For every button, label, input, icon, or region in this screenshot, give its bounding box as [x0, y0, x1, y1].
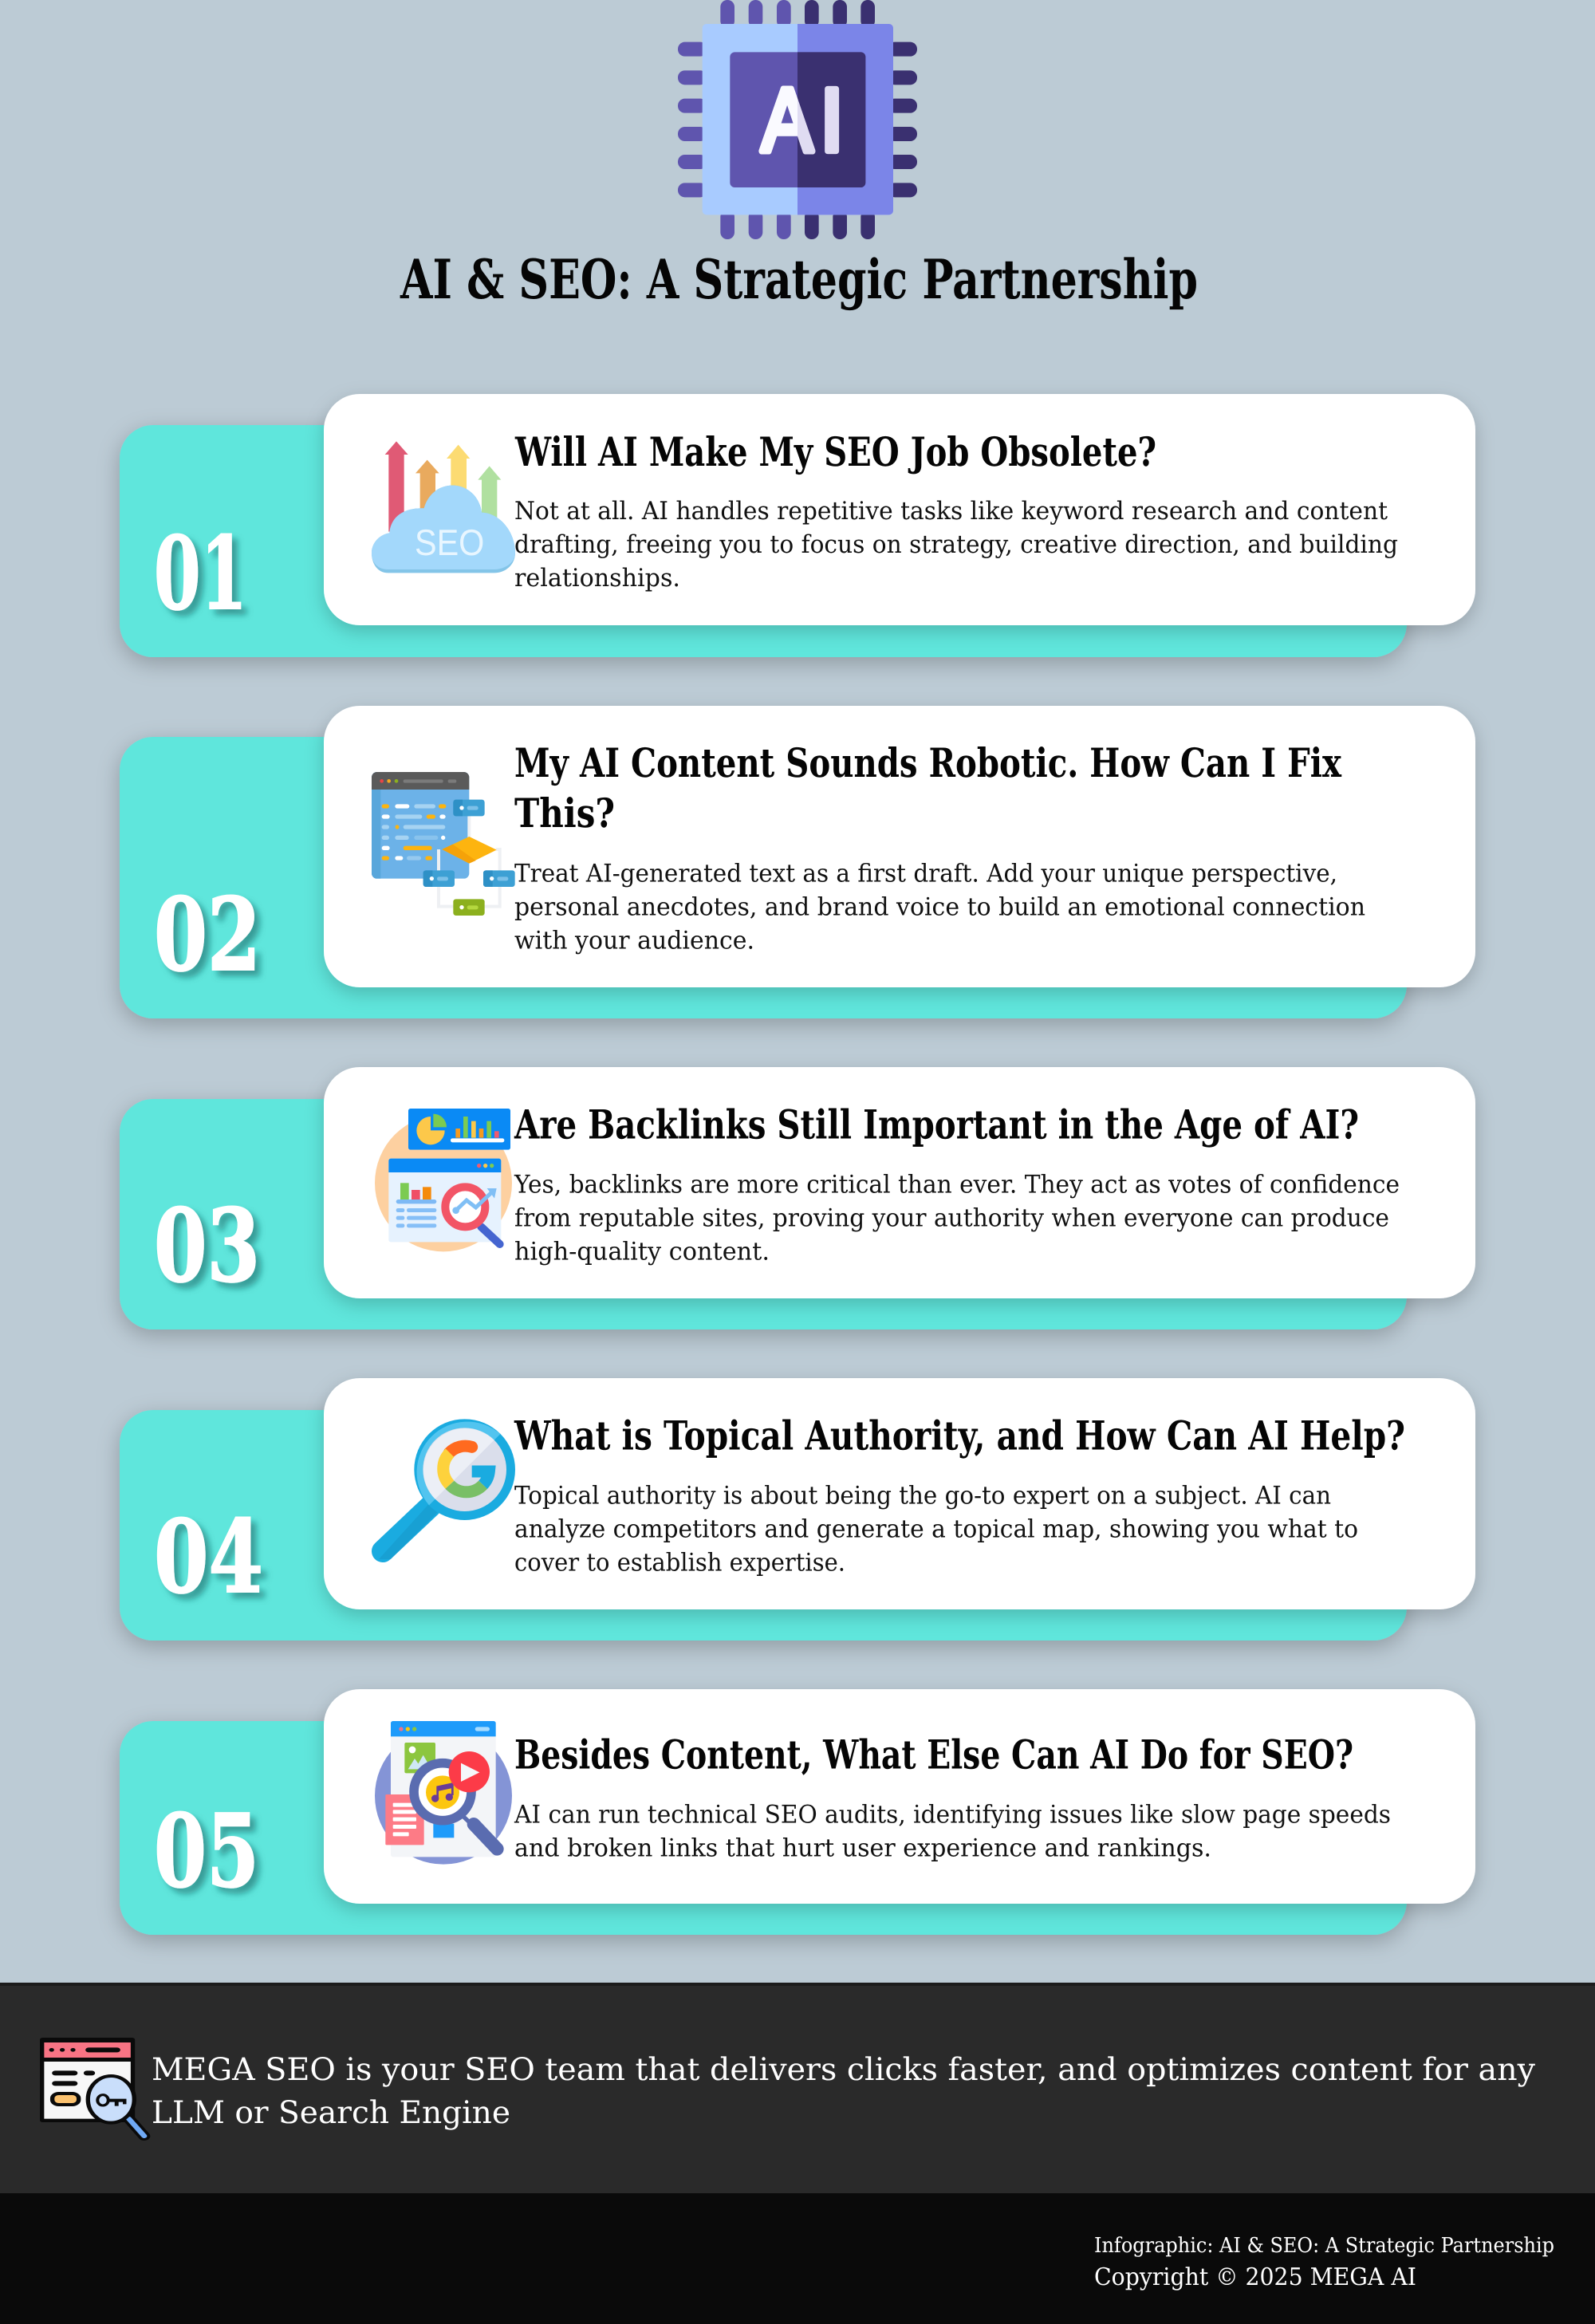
- footer message: LLM or Search Engine: [152, 2095, 510, 2131]
- teal backing card 04: [120, 1410, 1407, 1641]
- white card 04: [324, 1378, 1475, 1609]
- body text 02: personal anecdotes, and brand voice to build an emotional connection: [514, 893, 1365, 922]
- icon: flowchart window: [372, 772, 515, 916]
- icon: AI chip: A: [762, 69, 813, 171]
- body text 02: with your audience.: [514, 927, 754, 955]
- body text 01: drafting, freeing you to focus on strategy, creative direction, and building: [514, 530, 1398, 559]
- white card 01: [324, 394, 1475, 625]
- icon: Google magnifier: [379, 1419, 515, 1559]
- heading 03: Are Backlinks Still Important in the Age of AI?: [514, 1101, 1359, 1148]
- body text 05: AI can run technical SEO audits, identifying issues like slow page speeds: [514, 1801, 1391, 1830]
- heading 01: Will AI Make My SEO Job Obsolete?: [514, 428, 1156, 475]
- white card 02: [324, 706, 1475, 987]
- body text 03: high-quality content.: [514, 1238, 770, 1266]
- white card 05: [324, 1689, 1475, 1904]
- body text 03: [514, 1171, 1400, 1266]
- body text 01: Not at all. AI handles repetitive tasks like keyword research and content: [514, 497, 1388, 526]
- number 03: 03: [154, 1187, 260, 1305]
- number 04: 04: [154, 1498, 263, 1616]
- body text 04: analyze competitors and generate a topical map, showing you what to: [514, 1515, 1358, 1544]
- teal backing card 05: [120, 1721, 1407, 1935]
- heading 05: Besides Content, What Else Can AI Do for SEO?: [514, 1731, 1353, 1778]
- body text 05: [514, 1801, 1391, 1863]
- teal backing card 02: [120, 737, 1407, 1018]
- icon: SEO cloud with arrows: SEO: [415, 522, 484, 563]
- title: AI & SEO: A Strategic Partnership: [400, 248, 1198, 312]
- body text 02: Treat AI-generated text as a first draft. Add your unique perspective,: [514, 860, 1337, 888]
- footer message: [152, 2052, 1535, 2131]
- body text 01: [514, 497, 1398, 593]
- footer message: MEGA SEO is your SEO team that delivers clicks faster, and optimizes content for any: [152, 2052, 1535, 2088]
- icon: media search: [375, 1721, 512, 1865]
- panel: item 05: [120, 1689, 1475, 1935]
- heading 04: What is Topical Authority, and How Can AI Help?: [514, 1412, 1405, 1459]
- icon: AI chip: [678, 0, 917, 239]
- body text 04: cover to establish expertise.: [514, 1549, 845, 1578]
- panel: footer call to action: [0, 1983, 1595, 2193]
- number 05: 05: [154, 1792, 259, 1910]
- number 02: 02: [154, 876, 261, 994]
- infographic credit: Infographic: AI & SEO: A Strategic Partnership: [1094, 2234, 1554, 2258]
- panel: item 02: [120, 706, 1475, 1018]
- heading 02: [514, 739, 1342, 837]
- teal backing card 03: [120, 1099, 1407, 1329]
- body text 04: [514, 1482, 1358, 1578]
- footer background: [0, 1983, 1595, 2193]
- icon: AI chip: I: [819, 69, 845, 171]
- icon: analytics dashboard: [375, 1109, 512, 1251]
- heading 02: This?: [514, 790, 615, 837]
- white card 03: [324, 1067, 1475, 1298]
- body text 02: [514, 860, 1365, 955]
- heading 02: My AI Content Sounds Robotic. How Can I Fix: [514, 739, 1342, 786]
- body text 03: from reputable sites, proving your authority when everyone can produce: [514, 1204, 1389, 1233]
- panel: item 03: [120, 1067, 1475, 1329]
- body text 05: and broken links that hurt user experience and rankings.: [514, 1834, 1211, 1863]
- teal backing card 01: [120, 425, 1407, 657]
- icon: keyword search window: [40, 2038, 144, 2136]
- panel: item 04: [120, 1378, 1475, 1641]
- number 01: 01: [154, 514, 247, 632]
- body text 01: relationships.: [514, 564, 680, 593]
- copyright notice: Copyright © 2025 MEGA AI: [1094, 2263, 1416, 2291]
- copyright background: [0, 2193, 1595, 2324]
- panel: copyright bar: [0, 2193, 1595, 2324]
- body text 04: Topical authority is about being the go-to expert on a subject. AI can: [514, 1482, 1331, 1511]
- body text 03: Yes, backlinks are more critical than ever. They act as votes of confidence: [514, 1171, 1400, 1199]
- icon: SEO cloud with arrows: [372, 441, 515, 573]
- panel: item 01: [120, 394, 1475, 657]
